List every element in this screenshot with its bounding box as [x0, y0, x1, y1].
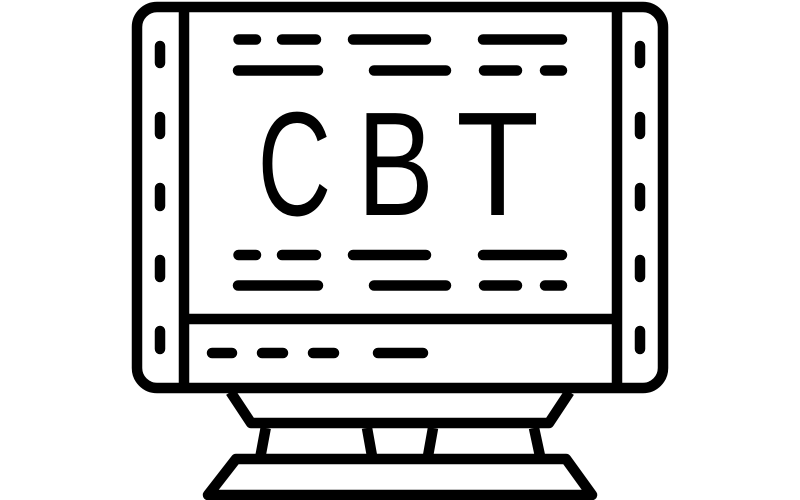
stand legs: [260, 428, 540, 456]
lower bar divider: [184, 314, 617, 324]
stand neck: [230, 392, 570, 423]
letter T: T: [456, 82, 539, 247]
letter C: C: [258, 81, 331, 246]
lower text lines: [238, 255, 562, 286]
left side divider: [179, 7, 189, 388]
icon: monitor: [137, 7, 663, 388]
heading: CBT: [258, 81, 539, 247]
upper text lines: [238, 40, 562, 70]
monitor frame: [137, 7, 663, 388]
right side divider: [612, 7, 622, 388]
right side dashes: [635, 46, 645, 349]
lower bar dashes: [212, 348, 423, 358]
icon: monitor stand: [208, 392, 592, 495]
left side dashes: [155, 46, 165, 349]
stand base: [208, 459, 592, 495]
letter B: B: [357, 82, 434, 247]
